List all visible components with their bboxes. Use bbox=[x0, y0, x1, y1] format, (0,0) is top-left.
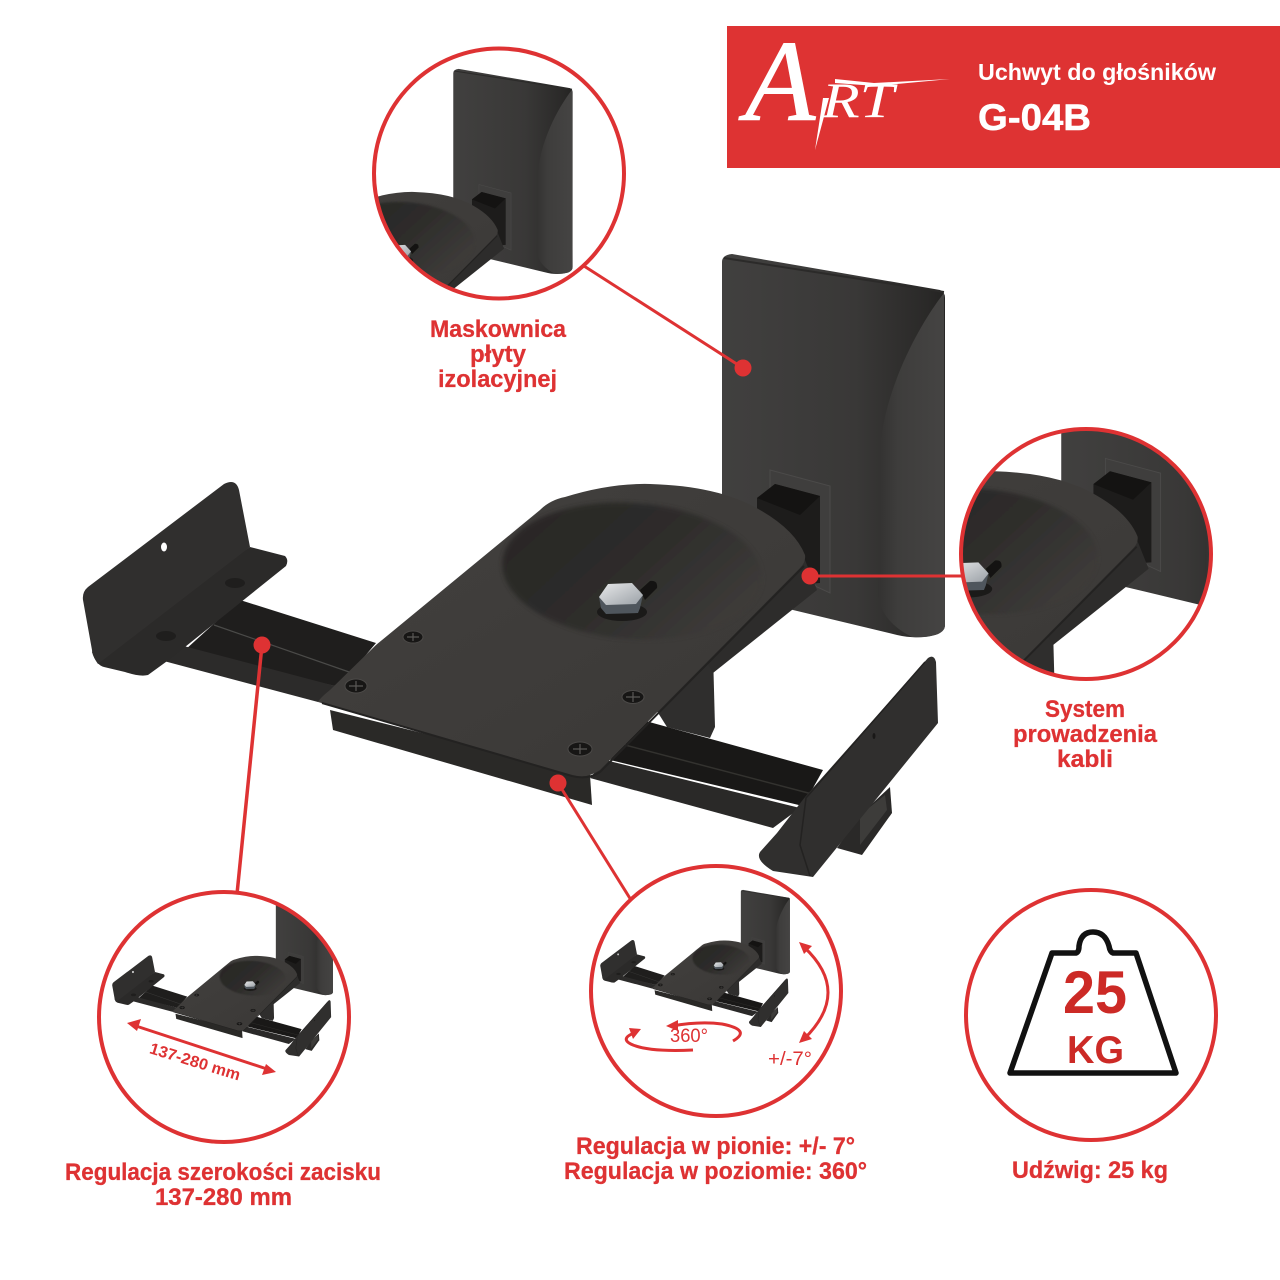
back wall plate bbox=[722, 254, 945, 637]
label: plate cover bbox=[430, 316, 567, 393]
rotation value: 360° bbox=[670, 1026, 708, 1047]
label: clamp width: Regulacja szerokości zacisku bbox=[65, 1159, 381, 1186]
circle: tilt and swivel adjustment bbox=[591, 866, 841, 1116]
label: adjustment bbox=[564, 1133, 867, 1185]
model name: G-04B bbox=[978, 97, 1091, 138]
circle: clamp width adjustment bbox=[99, 892, 349, 1142]
right rail bbox=[590, 720, 823, 828]
icon: weight: KG bbox=[1067, 1029, 1124, 1072]
callout lines and dots bbox=[237, 266, 964, 900]
circle: load capacity bbox=[966, 890, 1216, 1140]
icon: weight: 25 bbox=[1063, 959, 1127, 1026]
centre bolt bbox=[597, 581, 657, 621]
main product: speaker wall bracket bbox=[83, 254, 945, 877]
tilt value: +/-7° bbox=[768, 1049, 812, 1070]
rotation arrow bbox=[626, 1020, 740, 1050]
label: cable routing: kabli bbox=[1057, 746, 1113, 773]
label: cable routing: prowadzenia bbox=[1013, 721, 1158, 748]
tilt arrow bbox=[799, 942, 828, 1043]
dish platform bbox=[318, 484, 805, 805]
left rail bbox=[160, 600, 376, 702]
right clamp bracket bbox=[759, 657, 938, 877]
circle: cable routing detail bbox=[959, 427, 1213, 681]
circle: plate cover detail bbox=[372, 46, 626, 300]
width arrow bbox=[127, 1019, 276, 1075]
logo ART: RT bbox=[821, 72, 898, 128]
label: cable routing: System bbox=[1045, 696, 1125, 723]
width value: 137-280 mm bbox=[147, 1041, 242, 1084]
left clamp bracket bbox=[83, 482, 287, 676]
label: plate cover: Maskownica bbox=[430, 316, 567, 343]
label: plate cover: izolacyjnej bbox=[438, 366, 557, 393]
header banner bbox=[727, 18, 1280, 168]
label: cable routing bbox=[1013, 696, 1158, 773]
icon: weight bbox=[1010, 932, 1176, 1073]
label: load capacity: Udźwig: 25 kg bbox=[1012, 1157, 1168, 1184]
product type: Uchwyt do głośników bbox=[978, 59, 1216, 85]
logo ART: A bbox=[738, 18, 816, 145]
platform screws bbox=[345, 631, 644, 756]
logo ART bbox=[738, 18, 950, 150]
label: clamp width: 137-280 mm bbox=[155, 1184, 292, 1211]
label: adjustment: Regulacja w poziomie: 360° bbox=[564, 1158, 867, 1185]
support arm and column bbox=[650, 560, 817, 738]
label: plate cover: płyty bbox=[470, 341, 527, 368]
label: adjustment: Regulacja w pionie: +/- 7° bbox=[576, 1133, 855, 1160]
label: clamp width bbox=[65, 1159, 381, 1211]
